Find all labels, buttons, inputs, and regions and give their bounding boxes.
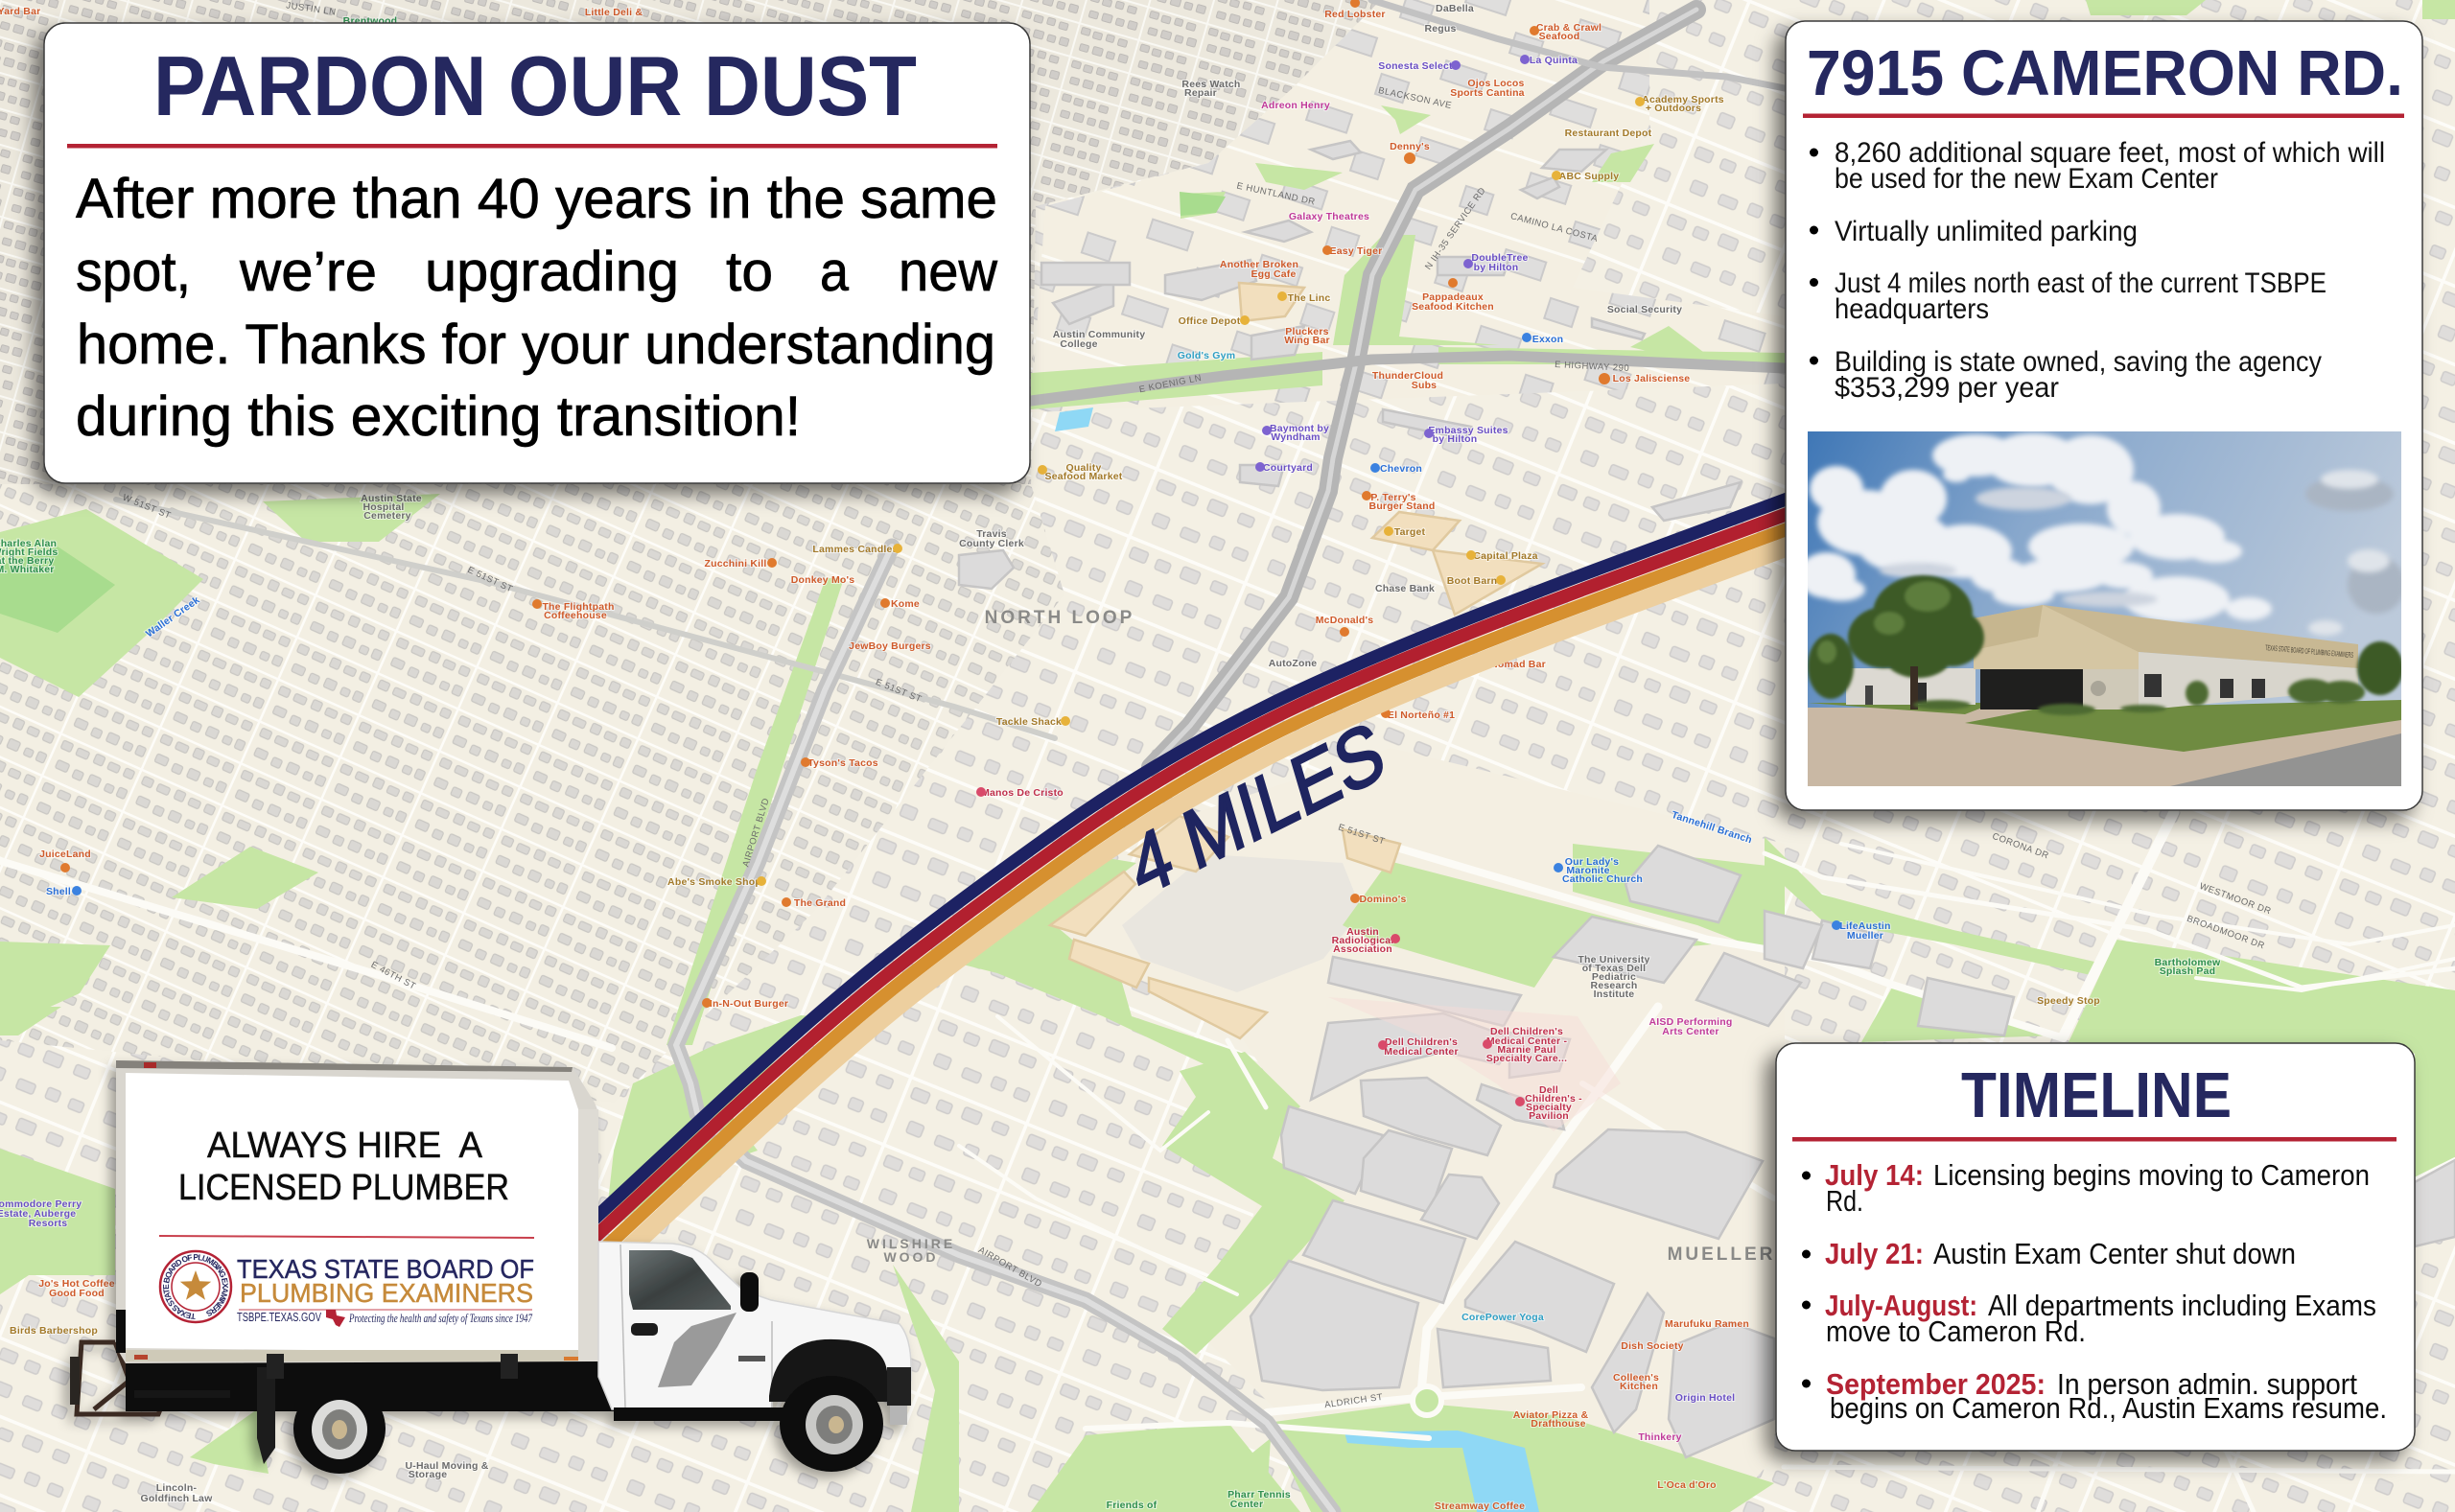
map place labels: In-N-Out Burger: [710, 998, 788, 1010]
map place labels: Our Lady's: [1565, 856, 1619, 868]
intro text: a: [820, 241, 850, 303]
map place labels: Marufuku Ramen: [1665, 1318, 1749, 1330]
map place labels: Seafood Kitchen: [1412, 301, 1494, 313]
map place labels: BROADMOOR DR: [2186, 914, 2266, 951]
sign: always hire a licensed plumber: ALWAYS HIRE A: [207, 1126, 483, 1166]
map place labels: The University: [1578, 954, 1650, 965]
map place labels: Easy Tiger: [1330, 245, 1382, 257]
truck illustration: [58, 1058, 913, 1486]
map place labels: Children's -: [1525, 1093, 1582, 1105]
map place labels: Center: [1230, 1499, 1263, 1510]
map place labels: Denny's: [1390, 141, 1430, 152]
intro text: spot,: [76, 241, 191, 303]
map place labels: Association: [1333, 943, 1392, 955]
map place labels: E 51ST ST: [1337, 823, 1387, 848]
map place labels: Thinkery: [1638, 1431, 1682, 1443]
sign: always hire a licensed plumber: [178, 1126, 509, 1208]
map place labels: Waller Creek: [144, 594, 202, 640]
map place labels: Shell: [46, 886, 71, 897]
logo: texas state board of plumbing examiners: Protecting the health and safety of Texans since 1947: [348, 1311, 532, 1325]
map place labels: Bartholomew: [2155, 957, 2221, 968]
map place labels: Embassy Suites: [1428, 425, 1508, 436]
map place labels: E KOENIG LN: [1138, 373, 1203, 395]
map place labels: Dell Children's: [1385, 1036, 1458, 1048]
map place labels: Friends of: [1107, 1500, 1157, 1511]
map place labels: Marnie Paul: [1497, 1044, 1556, 1056]
map place labels: Social Security: [1607, 304, 1682, 315]
map place labels: N IH-35 SERVICE RD: [1423, 186, 1488, 272]
map place labels: Institute: [1594, 989, 1634, 1000]
map place labels: Restaurant Depot: [1565, 128, 1652, 139]
map place labels: CorePower Yoga: [1461, 1312, 1544, 1323]
timeline entries: In person admin. support: [2057, 1367, 2357, 1401]
map place labels: U-Haul Moving &: [405, 1460, 489, 1472]
map place labels: Pluckers: [1285, 326, 1329, 337]
map place labels: The Flightpath: [542, 601, 615, 613]
map place labels: Kome: [891, 598, 920, 610]
map place labels: Domino's: [1359, 894, 1407, 905]
route band: 4 mile stripes: [579, 485, 1839, 1266]
photo: new building: [1798, 431, 2405, 786]
map place labels: Arts Center: [1662, 1026, 1719, 1037]
map place labels: Burger Stand: [1369, 500, 1435, 512]
timeline entries: move to Cameron Rd.: [1826, 1314, 2086, 1348]
map place labels: JewBoy Burgers: [849, 640, 931, 652]
panel: 7915 cameron rd: [1786, 21, 2422, 810]
bullet list: building facts: Virtually unlimited parking: [1835, 216, 2138, 247]
map place labels: Specialty: [1526, 1102, 1572, 1113]
map place labels: CORONA DR: [1991, 831, 2050, 861]
map place labels: Jo's Hot Coffee: [38, 1278, 115, 1290]
map place labels: E 51ST ST: [466, 565, 514, 594]
map place labels: Catholic Church: [1562, 873, 1643, 885]
intro text: new: [899, 241, 998, 303]
map place labels: of Texas Dell: [1582, 963, 1646, 974]
map place labels: WILSHIRE: [867, 1236, 955, 1251]
map place labels: The Linc: [1288, 292, 1330, 304]
timeline entries: All departments including Exams: [1988, 1289, 2376, 1322]
map place labels: La Quinta: [1530, 55, 1578, 66]
panel: pardon our dust: [44, 23, 1030, 483]
intro text: [76, 168, 998, 448]
timeline entries: July 21:: [1825, 1237, 1924, 1270]
intro text: to: [726, 241, 773, 303]
map place labels: Chase Bank: [1375, 583, 1435, 594]
map place labels: Pharr Tennis: [1228, 1489, 1291, 1500]
map place labels: Wyndham: [1271, 431, 1321, 443]
map place labels: Austin Community: [1053, 329, 1145, 340]
label: 4 MILES: 4 MILES: [1120, 703, 1393, 914]
bullet list: building facts: be used for the new Exam Center: [1835, 163, 2218, 195]
map place labels: El Norteño #1: [1388, 709, 1455, 721]
panel: timeline: [1776, 1043, 2415, 1451]
timeline entries: Austin Exam Center shut down: [1933, 1237, 2296, 1270]
map place labels: Kitchen: [1620, 1381, 1658, 1392]
map place labels: Colleen's: [1613, 1372, 1659, 1384]
intro text: home. Thanks for your understanding: [77, 314, 995, 376]
map place labels: Abe's Smoke Shop: [667, 876, 761, 888]
map place labels: Maronite: [1566, 865, 1610, 876]
sign: always hire a licensed plumber: LICENSED PLUMBER: [178, 1168, 509, 1208]
map place labels: Wing Bar: [1284, 335, 1330, 346]
map place labels: Subs: [1412, 380, 1437, 391]
lift gate: [70, 1342, 180, 1414]
map place labels: College: [1060, 338, 1098, 350]
map place labels: Sonesta Select: [1378, 60, 1453, 72]
map place labels: Tannehill Branch: [1670, 809, 1753, 846]
logo: texas state board of plumbing examiners: [159, 1250, 534, 1327]
map place labels: Target: [1394, 526, 1426, 538]
map place labels: Aviator Pizza &: [1513, 1409, 1588, 1421]
map place labels: Dish Society: [1621, 1340, 1684, 1352]
map place labels: Good Food: [49, 1288, 105, 1299]
intro text: After more than 40 years in the same: [76, 168, 997, 230]
map place labels: The Grand: [794, 897, 846, 909]
map place labels: Tackle Shack: [996, 716, 1062, 728]
map place labels: Pappadeaux: [1422, 291, 1484, 303]
map place labels: E HIGHWAY 290: [1555, 360, 1629, 374]
bullet list: building facts: [1810, 137, 2385, 404]
map place labels: ThunderCloud: [1372, 370, 1443, 382]
map place labels: Gold's Gym: [1178, 350, 1235, 361]
map place labels: L'Oca d'Oro: [1657, 1479, 1717, 1491]
map place labels: Chevron: [1380, 463, 1422, 475]
timeline entries: July-August:: [1825, 1289, 1977, 1322]
rear wheel: [293, 1384, 386, 1474]
map place labels: Medical Center -: [1486, 1035, 1567, 1047]
map place labels: Dell Children's: [1490, 1026, 1563, 1037]
intro text: upgrading: [425, 241, 679, 303]
logo: texas state board of plumbing examiners: TSBPE.TEXAS.GOV: [237, 1311, 321, 1324]
map place labels: CAMINO LA COSTA: [1509, 211, 1600, 244]
map place labels: Storage: [409, 1469, 447, 1480]
map place labels: Specialty Care...: [1486, 1053, 1567, 1064]
map place labels: Pavilion: [1529, 1110, 1569, 1122]
bullet list: building facts: Building is state owned, saving the agency: [1835, 346, 2322, 378]
map place labels: MUELLER: [1668, 1244, 1775, 1265]
map place labels: E 51ST ST: [874, 677, 924, 705]
map place labels: Courtyard: [1263, 462, 1313, 474]
timeline entries: begins on Cameron Rd., Austin Exams resume.: [1830, 1391, 2387, 1425]
map place labels: P. Terry's: [1370, 492, 1416, 503]
intro text: during this exciting transition!: [76, 385, 801, 448]
bullet list: building facts: $353,299 per year: [1835, 372, 2059, 404]
map place labels: Seafood Market: [1045, 471, 1123, 482]
map place labels: County Clerk: [959, 538, 1024, 549]
cargo box: [116, 1060, 598, 1379]
map place labels: Donkey Mo's: [791, 574, 854, 586]
map place labels: Zucchini Kill: [704, 558, 767, 570]
map place labels: Mueller: [1847, 930, 1883, 942]
map place labels: Regus: [1424, 23, 1457, 35]
map place labels: BLACKSON AVE: [1377, 85, 1453, 111]
map place labels: Repair: [1184, 87, 1217, 99]
timeline entries: Licensing begins moving to Cameron: [1933, 1158, 2370, 1192]
map place labels: Quality: [1066, 462, 1101, 474]
map place labels: Research: [1591, 980, 1637, 991]
front wheel: [780, 1376, 883, 1472]
map place labels: Austin State: [361, 493, 422, 504]
map place labels: Splash Pad: [2160, 965, 2215, 977]
map place labels: Academy Sports: [1642, 94, 1724, 105]
map place labels: DaBella: [1436, 3, 1474, 14]
map place labels: Speedy Stop: [2037, 995, 2100, 1007]
map place labels: NORTH LOOP: [985, 608, 1134, 628]
map place labels: Egg Cafe: [1251, 268, 1297, 280]
logo: texas state board of plumbing examiners: PLUMBING EXAMINERS: [240, 1278, 533, 1308]
map place labels: ABC Supply: [1559, 171, 1619, 182]
map place labels: Dell: [1539, 1084, 1558, 1096]
map place labels: Tyson's Tacos: [807, 757, 878, 769]
map place labels: JuiceLand: [39, 849, 91, 860]
map place labels: Ojos Locos: [1467, 78, 1525, 89]
heading: pardon our dust: PARDON OUR DUST: [153, 38, 917, 133]
map place labels: Red Lobster: [1324, 9, 1386, 20]
map place labels: Drafthouse: [1531, 1418, 1586, 1430]
map place labels: Medical Center: [1384, 1046, 1459, 1058]
timeline entries: Rd.: [1826, 1184, 1863, 1218]
map place labels: Cemetery: [363, 510, 411, 522]
logo: texas state board of plumbing examiners: TEXAS STATE BOARD OF: [237, 1254, 534, 1284]
map place labels: Travis: [976, 528, 1007, 540]
map place labels: Manos De Cristo: [981, 787, 1064, 799]
map place labels: LifeAustin: [1839, 920, 1891, 932]
timeline entries: July 14:: [1825, 1158, 1924, 1192]
map place labels: Crab & Crawl: [1536, 22, 1602, 34]
map place labels: W 51ST ST: [121, 493, 173, 522]
map place labels: Pediatric: [1592, 971, 1636, 983]
map place labels: AutoZone: [1269, 658, 1317, 669]
map place labels: Rees Watch: [1181, 79, 1241, 90]
map place labels: Adreon Henry: [1261, 100, 1330, 111]
map place labels: Lammes Candles: [812, 544, 899, 555]
timeline entries: September 2025:: [1826, 1367, 2046, 1401]
map place labels: Another Broken: [1220, 259, 1298, 270]
heading: address: 7915 CAMERON RD.: [1807, 37, 2403, 109]
map place labels: Resorts: [29, 1218, 67, 1229]
map place labels: Boot Barn: [1447, 575, 1497, 587]
map place labels: Hospital: [362, 501, 405, 513]
map place labels: Lincoln-: [156, 1482, 198, 1494]
map place labels: JUSTIN LN: [286, 0, 337, 18]
map place labels: WOOD: [883, 1249, 939, 1265]
map place labels: Baymont by: [1270, 423, 1329, 434]
bullet list: building facts: Just 4 miles north east of the current TSBPE: [1835, 268, 2326, 299]
map place labels: Brentwood: [343, 15, 397, 27]
map place labels: Birds Barbershop: [10, 1325, 98, 1337]
map place labels: + Outdoors: [1646, 103, 1701, 114]
map place labels: E HUNTLAND DR: [1236, 180, 1317, 208]
map place labels: Streamway Coffee: [1435, 1500, 1525, 1512]
photo: new building: TEXAS STATE BOARD OF PLUMBING EXAMINERS: [2265, 643, 2353, 660]
map place labels: Los Jalisciense: [1613, 373, 1690, 384]
map place labels: ALDRICH ST: [1323, 1392, 1384, 1410]
map place labels: Origin Hotel: [1675, 1392, 1735, 1404]
heading: timeline: TIMELINE: [1961, 1059, 2232, 1131]
map place labels: Galaxy Theatres: [1289, 211, 1369, 222]
bullet list: building facts: 8,260 additional square feet, most of which will: [1835, 137, 2385, 169]
map place labels: Little Deli &: [585, 7, 643, 18]
map place labels: Exxon: [1532, 334, 1563, 345]
map place labels: WESTMOOR DR: [2198, 881, 2273, 917]
map place labels: DoubleTree: [1471, 252, 1529, 264]
map place labels: AISD Performing: [1648, 1016, 1733, 1028]
map place labels: by Hilton: [1474, 262, 1518, 273]
map place labels: Austin: [1346, 926, 1379, 938]
map place labels: Office Depot: [1179, 315, 1241, 327]
map place labels: Sports Cantina: [1450, 87, 1525, 99]
map place labels: Radiological: [1332, 935, 1393, 946]
map place labels: Seafood: [1539, 31, 1579, 42]
map place labels: AIRPORT BLVD: [976, 1244, 1043, 1290]
map place labels: Goldfinch Law: [141, 1493, 213, 1504]
cab: [598, 1242, 911, 1425]
map place labels: Nomad Bar: [1490, 659, 1546, 670]
map place labels: Coffeehouse: [544, 610, 607, 621]
map place labels: by Hilton: [1433, 433, 1477, 445]
logo: texas state board of plumbing examiners: TEXAS STATE BOARD OF PLUMBING EXAMINERS: [163, 1254, 228, 1319]
map place labels: E 46TH ST: [369, 960, 417, 992]
map place labels: Capital Plaza: [1473, 550, 1538, 562]
bullet list: building facts: headquarters: [1835, 293, 1989, 325]
map place labels: AIRPORT BLVD: [740, 797, 772, 869]
map place labels: McDonald's: [1316, 615, 1373, 626]
timeline entries: [1802, 1158, 2387, 1425]
intro text: we’re: [239, 241, 377, 303]
